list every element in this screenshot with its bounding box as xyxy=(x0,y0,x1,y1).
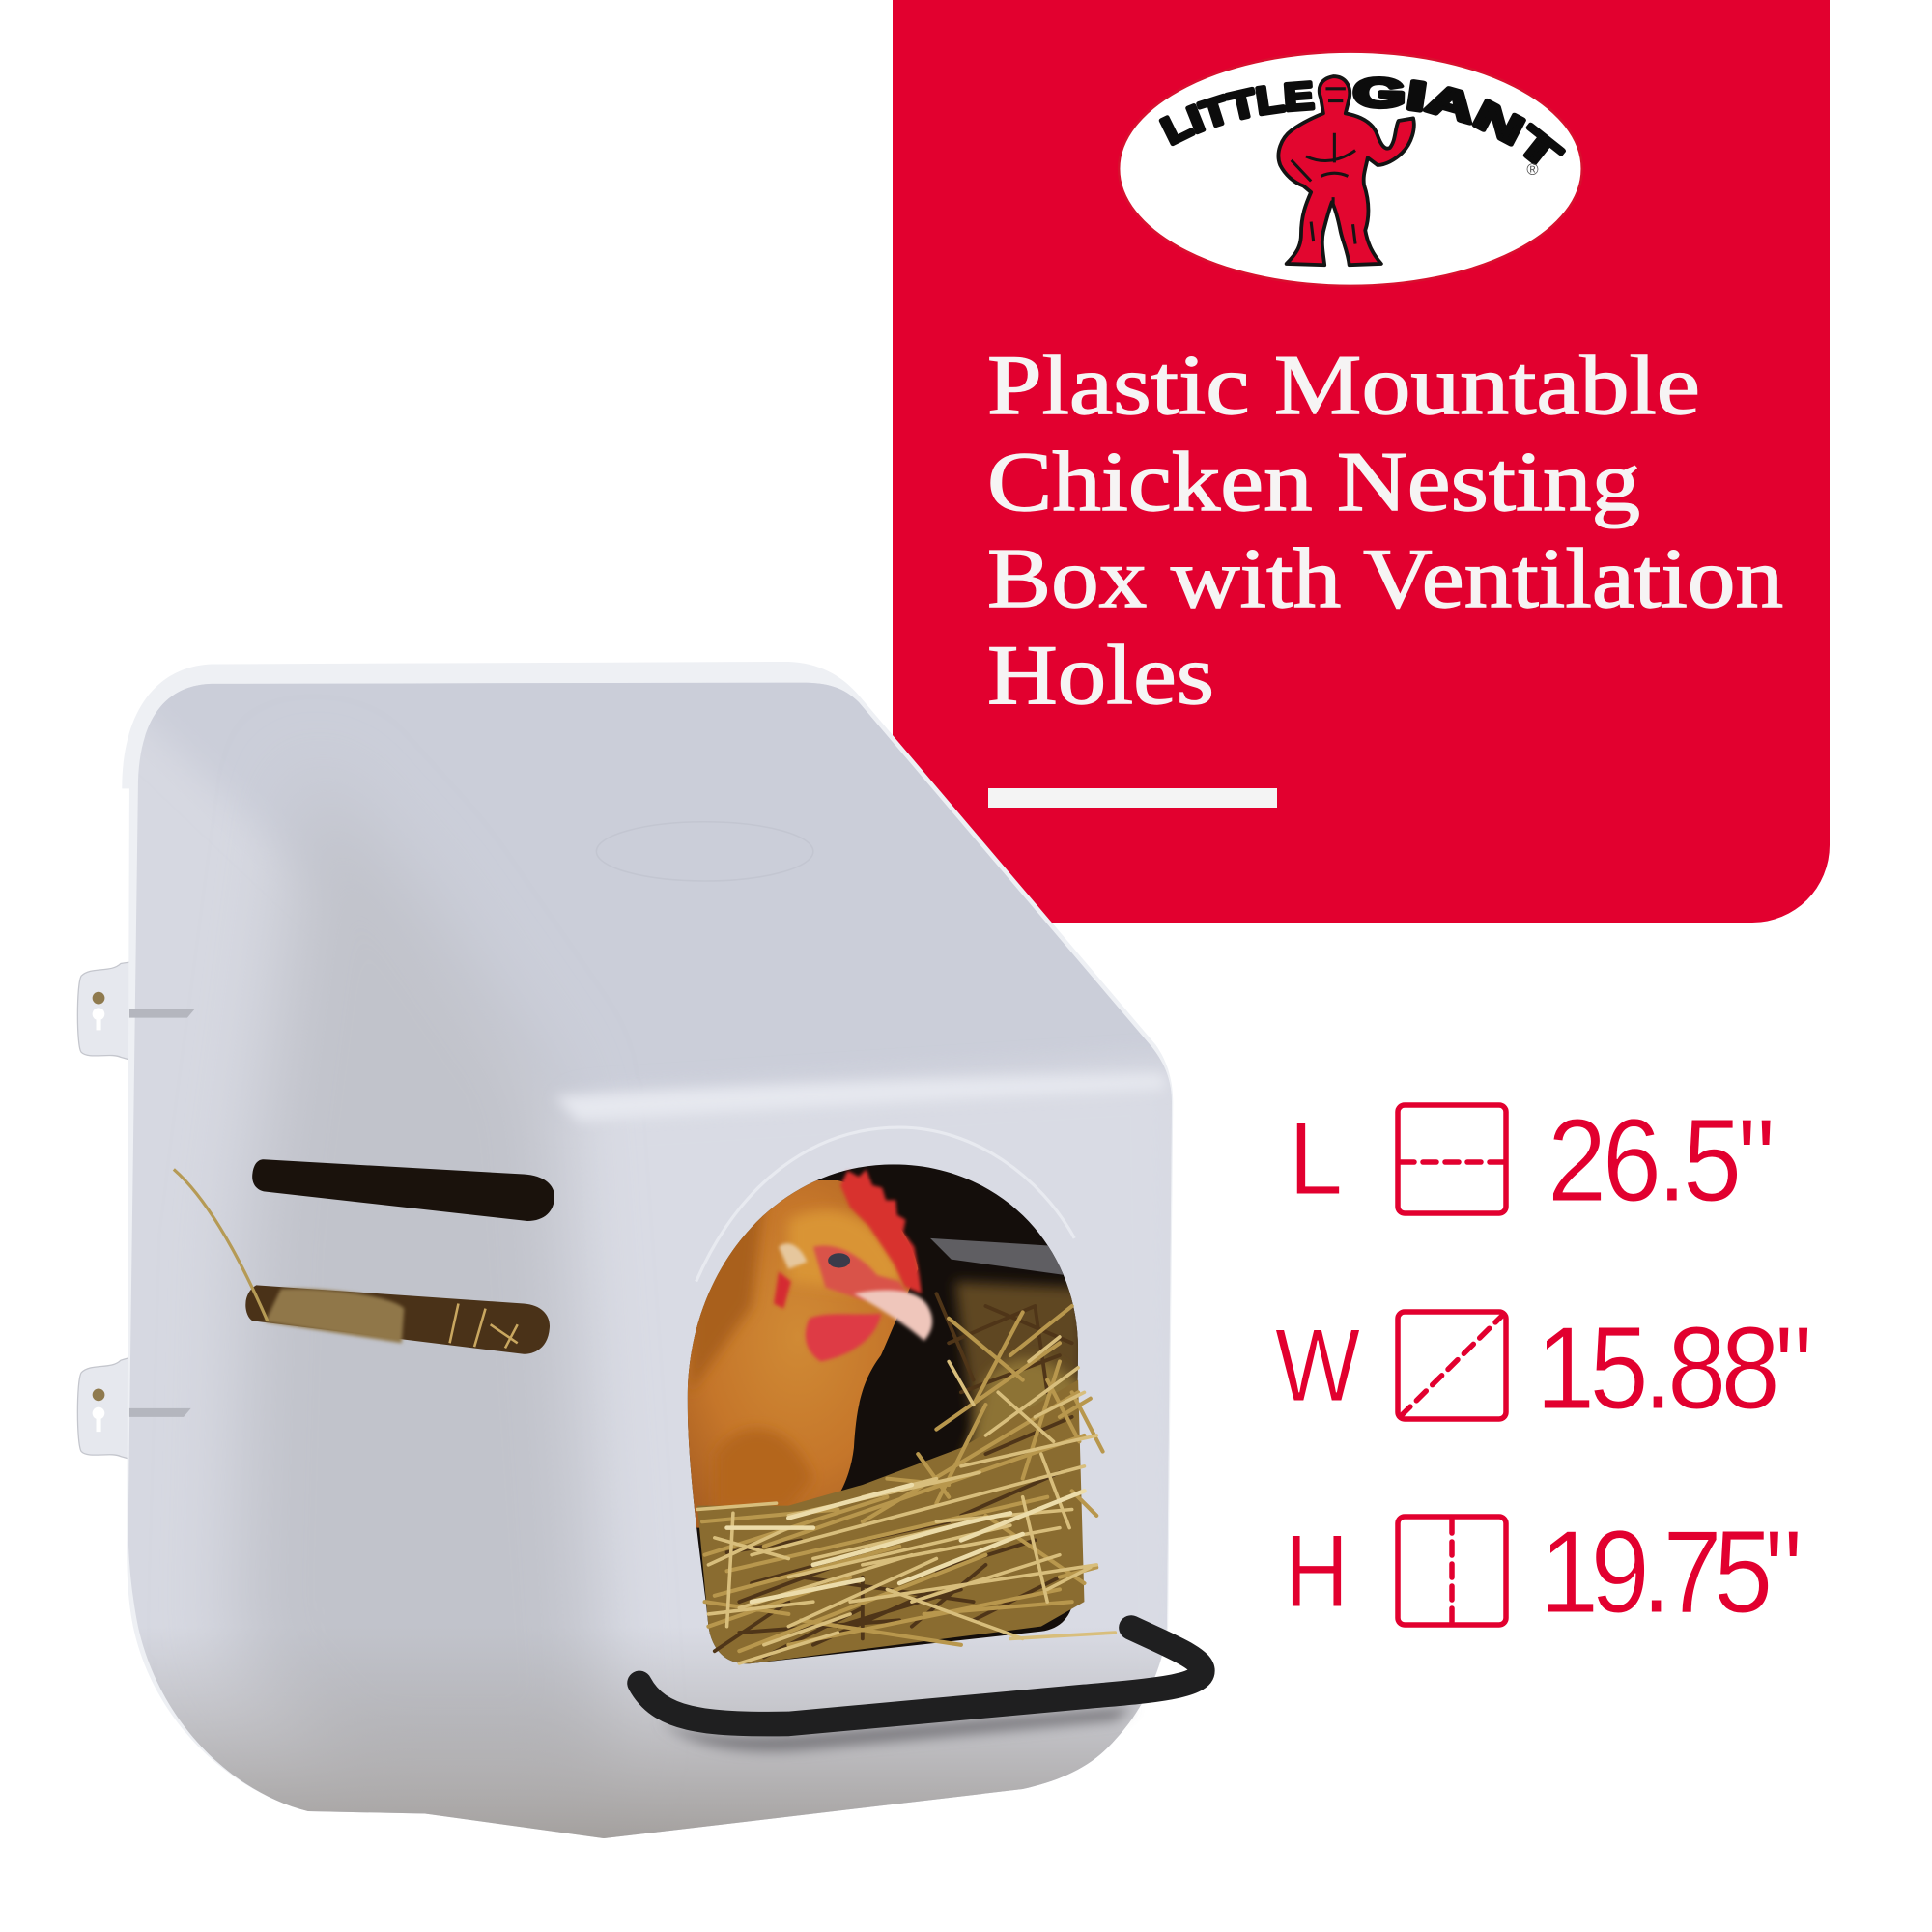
light straw xyxy=(697,1337,1115,1663)
straw base xyxy=(697,1380,1084,1663)
dimensions xyxy=(1275,1094,1812,1637)
dark interior xyxy=(678,1158,1084,1676)
hen body xyxy=(678,1180,918,1528)
tab screw and keyhole lower xyxy=(93,1388,104,1432)
box body shading xyxy=(128,682,1172,1838)
logo oval xyxy=(1119,52,1582,286)
icon: length square xyxy=(1398,1105,1506,1213)
icon: width square xyxy=(1398,1312,1506,1419)
product: nesting box with hen xyxy=(74,653,1220,1848)
interior metal plate xyxy=(930,1238,1074,1276)
box outer rim xyxy=(122,662,1173,1838)
perch shadow xyxy=(659,1707,1133,1750)
tab ridge lower xyxy=(129,1408,191,1417)
embossed logo on lid xyxy=(596,822,813,881)
mounting tab lower xyxy=(77,1355,138,1462)
hen wattle xyxy=(806,1314,881,1361)
logo registered mark: ® xyxy=(1526,160,1539,179)
letter W: W xyxy=(1275,1307,1360,1423)
hen comb xyxy=(840,1169,922,1293)
dimension W xyxy=(1275,1302,1812,1434)
mounting tab upper xyxy=(77,961,138,1062)
nest opening xyxy=(678,1158,1084,1676)
hen beak xyxy=(854,1290,932,1341)
letter H: H xyxy=(1285,1513,1349,1629)
title text: Box with Ventilation xyxy=(987,532,1783,626)
title text: Holes xyxy=(987,629,1214,723)
entrance arch embossing xyxy=(696,1127,1074,1282)
red title panel xyxy=(893,0,1830,923)
dark straw xyxy=(715,1293,1072,1658)
perch handle xyxy=(639,1628,1203,1724)
icon: height square xyxy=(1398,1517,1506,1625)
letter L: L xyxy=(1289,1100,1343,1216)
stray straw on side xyxy=(174,1169,268,1321)
hen face xyxy=(813,1245,909,1300)
highlight straw xyxy=(727,1485,1084,1602)
logo muscle man xyxy=(1278,76,1414,265)
value 26.5 inches: 26.5" xyxy=(1548,1094,1776,1226)
title text xyxy=(987,339,1783,723)
logo: Little Giant xyxy=(1118,50,1583,287)
tab screw and keyhole upper xyxy=(93,992,104,1030)
title underline bar xyxy=(988,788,1277,808)
mid straw xyxy=(702,1306,1103,1651)
back straw mass xyxy=(949,1275,1078,1449)
ventilation slot upper xyxy=(252,1159,554,1221)
value 19.75 inches: 19.75" xyxy=(1540,1506,1803,1637)
logo wordmark LITTLE: LITTLE xyxy=(1159,80,1316,147)
title text: Chicken Nesting xyxy=(987,436,1640,529)
straw nest xyxy=(697,1293,1115,1663)
logo wordmark GIANT: GIANT xyxy=(1352,76,1566,165)
dimension L xyxy=(1289,1094,1776,1226)
title text: Plastic Mountable xyxy=(987,339,1700,433)
dimension H xyxy=(1285,1506,1803,1637)
tab ridge upper xyxy=(129,1009,195,1018)
hen eye xyxy=(828,1253,850,1267)
ventilation slot lower xyxy=(245,1285,550,1354)
value 15.88 inches: 15.88" xyxy=(1536,1302,1812,1434)
hen ear xyxy=(774,1243,807,1309)
